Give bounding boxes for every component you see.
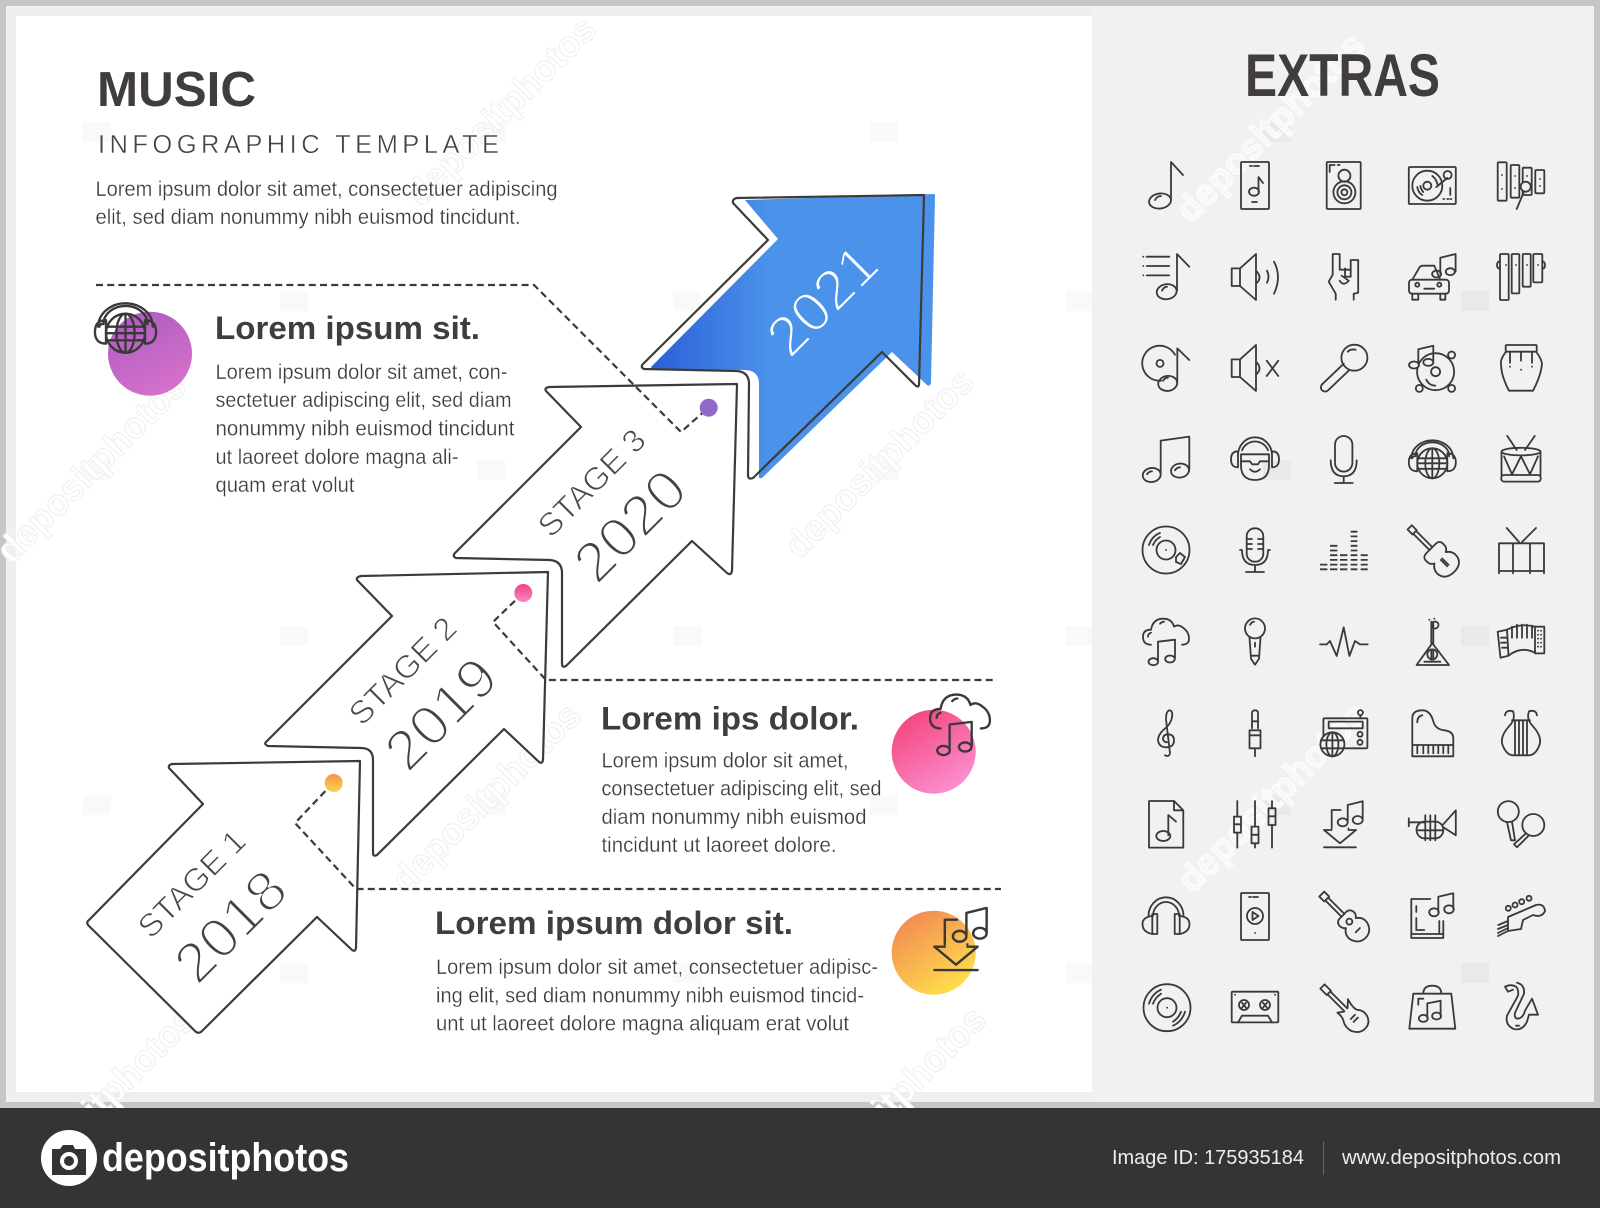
arrow: stage 2: 2019 [372,645,510,782]
body text [216,361,515,497]
icon: cloud music on pink circle [892,695,990,794]
panel: extras icon grid [1142,162,1545,1037]
arrow: stage 2: STAGE 2 [341,610,464,732]
icon: radio globe [1320,710,1367,756]
heading: Lorem ipsum dolor sit. [435,905,793,941]
body text: tincidunt ut laoreet dolore. [602,834,836,857]
icon: phone play [1241,893,1269,940]
watermark layer: depositphotos [788,998,994,1204]
image id: Image ID: 175935184 [1112,1147,1304,1169]
icon: subwoofer note [1409,346,1455,392]
icon: vinyl with needle [1142,526,1190,574]
icon: dj face [1231,437,1279,480]
marker dot: stage 2 [514,584,532,602]
icon: treble clef [1158,710,1174,756]
panel: main white [16,16,1092,1092]
icon: car notes [1409,254,1456,300]
watermark layer: depositphotos [398,8,604,214]
icon: trumpet [1409,810,1456,840]
extras heading: EXTRAS [1245,42,1440,109]
icon: phone music [1241,162,1269,209]
icon: note list [1143,254,1189,301]
icon: equalizer [1320,532,1368,569]
icon: electric guitar [1314,979,1373,1037]
title: MUSIC [97,63,256,117]
icon: globe headphones on purple circle [95,303,192,396]
icon: sound wave [1320,627,1368,656]
watermark layer: depositphotos [383,694,589,900]
icon: accordion [1498,625,1544,658]
arrow: stage 1: STAGE 1 [130,823,253,945]
icon: mixer sliders [1234,801,1276,848]
icon: handheld mic [1245,618,1265,665]
icon: music download on yellow circle [892,908,987,995]
body text: quam erat volut [216,474,355,497]
icon: music download [1324,801,1363,847]
icon: marimba [1497,254,1545,300]
icon: big drum [1499,528,1544,573]
icon: acoustic guitar [1313,885,1374,947]
icon: xylophone [1498,162,1544,209]
watermark layer: depositphotos [1169,694,1375,900]
arrow: stage 3: 2020 [561,457,699,594]
icon: cd note [1142,346,1189,392]
arrow: stage 1 [87,761,360,1033]
icon: speaker mute [1232,345,1278,391]
body text: Lorem ipsum dolor sit amet, con- [216,361,508,384]
icon: retro mic [1240,528,1270,572]
icon: audio jack [1250,710,1260,756]
icon: rock hand [1329,254,1358,300]
marker dot: stage 1 [325,774,343,792]
body text: Lorem ipsum dolor sit amet, consectetuer adipisc- [436,956,878,979]
footer bar [0,1108,1600,1208]
icon: headphones [1142,897,1190,934]
body text: diam nonummy nibh euismod [602,806,866,829]
icon: cassette [1232,992,1278,1022]
dashed connector: stage 1 [295,783,1001,889]
watermark layer: depositphotos [776,360,982,566]
icon: music note [1148,162,1183,210]
icon: music file [1149,801,1183,848]
icon: vinyl record [1144,984,1190,1031]
icon: maracas [1498,801,1544,847]
icon: speaker box [1327,162,1361,209]
body text [602,749,882,857]
intro text: elit, sed diam nonummy nibh euismod tincidunt. [96,206,520,229]
arrow: 2021 stage [642,194,935,479]
icon: balalaika [1417,619,1449,665]
body text: consectetuer adipiscing elit, sed [602,777,882,800]
icon: studio mic [1331,436,1357,483]
dashed connector: stage 2 [493,593,997,680]
heading: Lorem ips dolor. [601,700,859,736]
icon: grand piano [1412,710,1453,756]
icon: microphone [1321,345,1367,392]
icon: speaker volume [1232,254,1278,300]
icon: album notes [1411,893,1454,938]
icon: saxophone [1505,983,1538,1029]
icon: violin [1400,518,1464,581]
body text: Lorem ipsum dolor sit amet, [602,749,848,772]
icon: lyre [1502,711,1540,755]
arrow: stage 3 [454,384,737,667]
logo text: depositphotos [102,1136,349,1180]
icon: guitar head [1498,896,1545,936]
block: Lorem ips dolor [601,695,990,857]
panel: extras background [1092,6,1594,1102]
watermark layer: depositphotos [0,998,204,1204]
website: www.depositphotos.com [1341,1147,1561,1169]
heading: Lorem ipsum sit. [215,310,480,346]
icon: snare drum [1501,436,1541,482]
arrow: 2021 stage: 2021 [754,232,890,368]
body text: nonummy nibh euismod tincidunt [216,418,515,440]
watermark layer: depositphotos [1167,24,1373,230]
dashed connector: stage 4 [96,285,708,432]
icon: conga [1501,345,1542,391]
icon: cloud music [1143,619,1189,665]
body text: unt ut laoreet dolore magna aliquam erat volut [436,1013,849,1036]
arrow: stage 3: STAGE 3 [530,422,653,544]
arrow: stage 2 [265,572,548,856]
marker dot: stage 3 [700,399,718,417]
body text [436,956,878,1036]
icon: double note [1142,437,1190,483]
body text: sectetuer adipiscing elit, sed diam [216,389,512,412]
icon: globe headphones [1409,440,1456,478]
intro text: Lorem ipsum dolor sit amet, consectetuer adipiscing [96,178,558,201]
intro text [96,178,558,229]
body text: ut laoreet dolore magna ali- [216,446,459,469]
block: Lorem ipsum dolor sit [435,905,987,1036]
icon: music bag [1409,986,1455,1029]
subtitle: INFOGRAPHIC TEMPLATE [98,131,499,159]
block: Lorem ipsum sit [95,303,515,497]
logo: depositphotos camera [41,1130,97,1186]
body text: ing elit, sed diam nonummy nibh euismod tincid- [436,985,864,1008]
arrow: stage 1: 2018 [161,857,299,995]
icon: turntable [1409,167,1456,204]
